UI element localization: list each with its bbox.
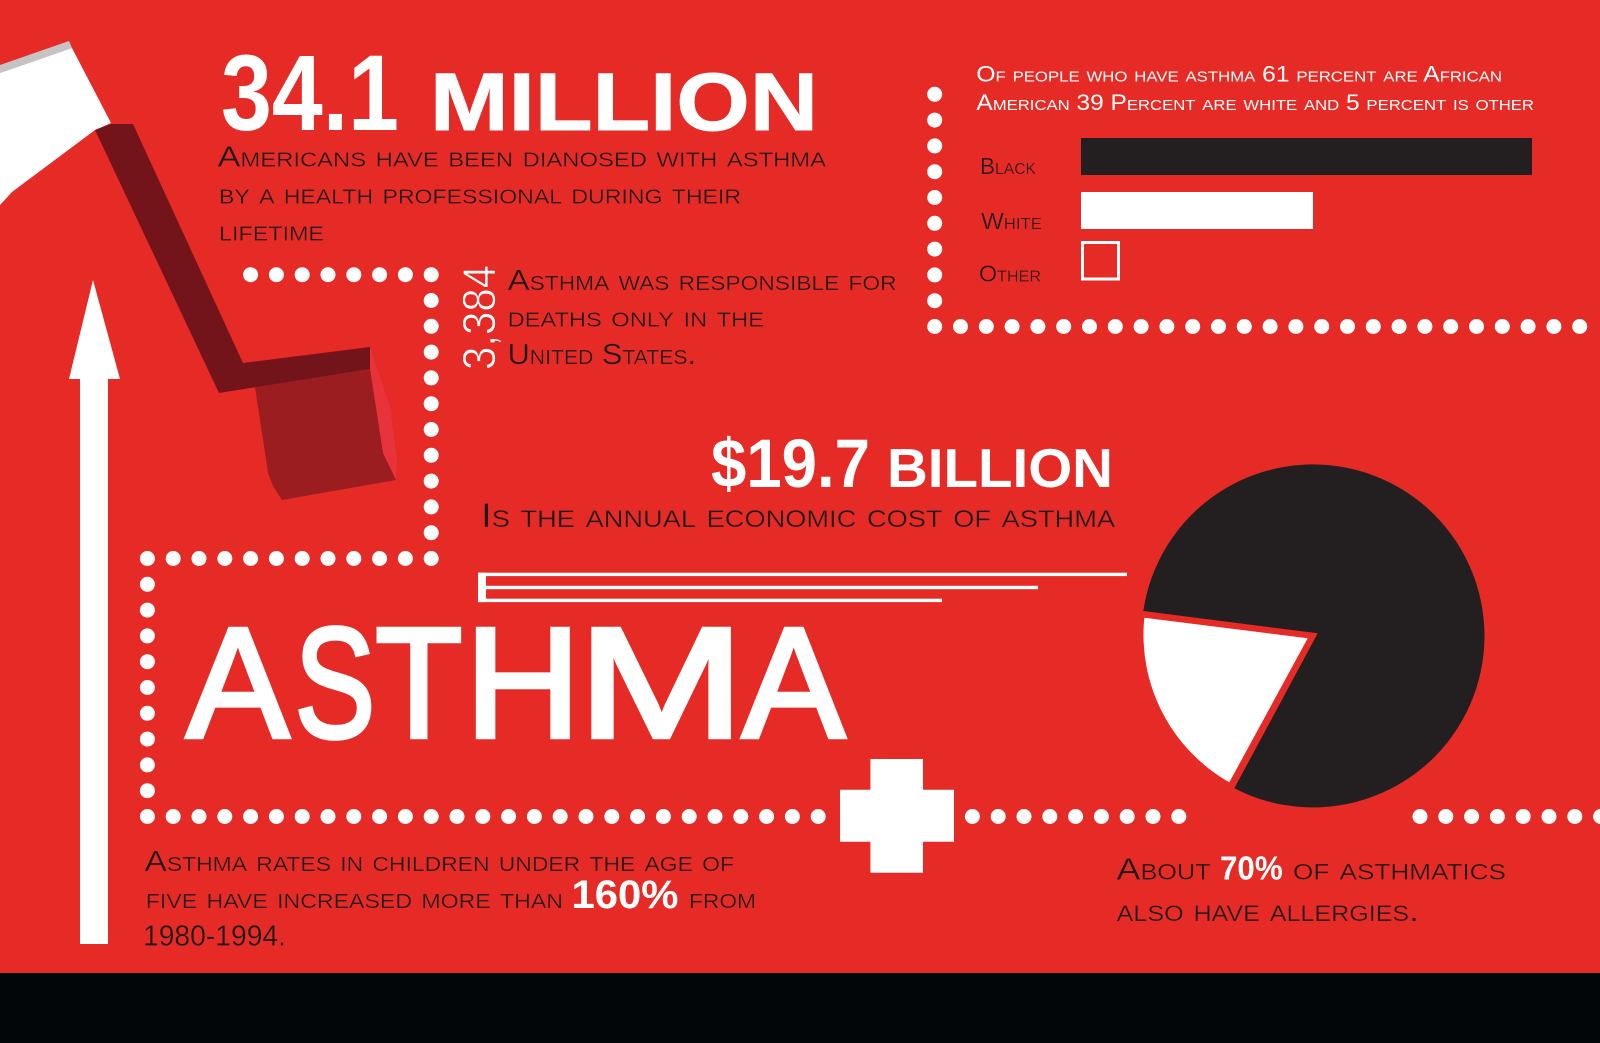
text block: Americans diagnosed [218,142,827,248]
heading: 34.1 million: 34.1 [221,32,399,153]
icon: medical cross [840,759,954,873]
heading: 34.1 million: MILLION [430,57,818,148]
text block: annual cost: Is the annual economic cost of asthma [481,497,1115,535]
title: ASTHMA: A [742,596,845,771]
text block: racial breakdown heading: Of people who have asthma 61 percent are African [976,62,1502,87]
bar chart: race [979,138,1532,287]
title: ASTHMA: A [186,596,289,771]
dotted connector: after cross [972,809,1179,824]
dotted connector: bottom right [1420,809,1600,824]
text block: deaths: United States. [508,339,696,371]
text block: allergies: also have allergies. [1117,893,1419,928]
title: ASTHMA: T [375,596,462,771]
bar chart: race: Black [980,153,1036,179]
pie chart [1143,464,1484,807]
text block: children rates: from [689,883,756,915]
decorative cost lines [478,573,1127,602]
heading: 34.1 million [221,32,818,153]
text block: deaths: Asthma was responsible for [508,265,897,297]
arrow: upward white arrow [69,280,120,944]
text block: children rates: 160% [572,873,678,917]
text block: Americans diagnosed: by a health professional during their [219,178,741,210]
icon: falling hatchet [0,41,397,500]
heading: 19.7 billion: $19.7 [711,425,870,502]
text block: allergies: of asthmatics [1293,851,1506,886]
black footer band [0,973,1600,1043]
title: ASTHMA: M [578,596,744,771]
text block: Americans diagnosed: lifetime [219,216,324,248]
text block: Americans diagnosed: Americans have been dianosed with asthma [218,142,827,174]
bar chart: race: White [981,208,1042,234]
dotted connector: left frame [147,275,819,816]
bar chart: race: Other [979,261,1041,287]
dotted connector: top right [935,94,1580,326]
title: ASTHMA: S [295,596,375,771]
text block: deaths [508,265,897,371]
heading: 19.7 billion: BILLION [887,437,1113,499]
text block: racial breakdown heading [976,62,1534,115]
text block: allergies: About [1117,851,1211,886]
text block: allergies [1117,849,1506,928]
text block: children rates: 1980-1994. [143,921,286,953]
rotated number: 3,384: 3,384 [453,265,505,370]
text block: children rates: Asthma rates in children under the age of [145,846,734,878]
text block: children rates: five have increased more than [146,883,563,915]
text block: allergies: 70% [1220,849,1283,886]
heading: 19.7 billion [711,425,1113,502]
text block: deaths: deaths only in the [508,302,764,334]
text block: children rates [143,846,756,953]
title: ASTHMA: H [465,596,581,771]
text block: racial breakdown heading: American 39 Percent are white and 5 percent is other [976,90,1534,115]
